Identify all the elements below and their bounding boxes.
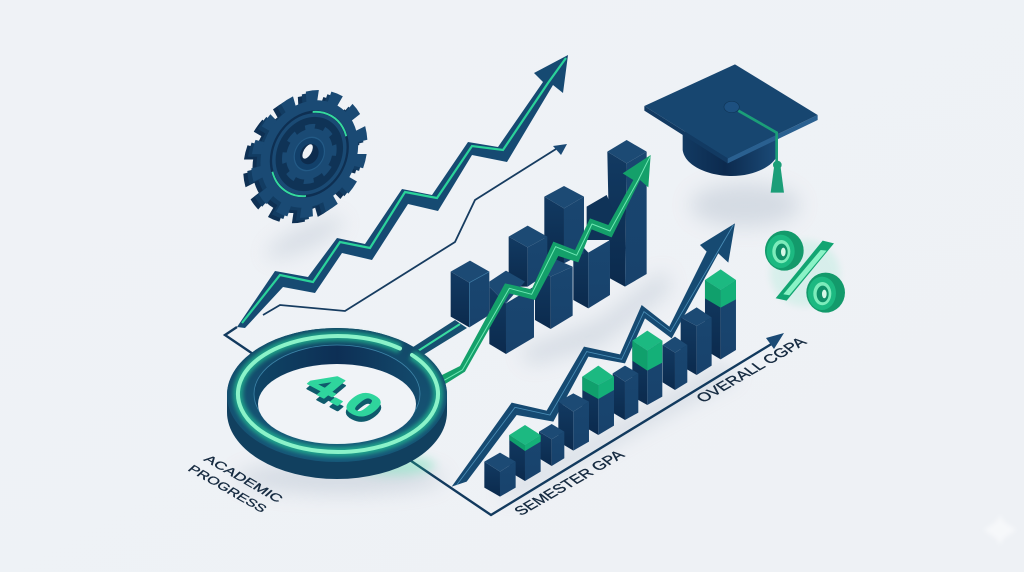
bar 2: [509, 425, 541, 481]
text: 4.0: 4.0: [296, 369, 393, 431]
icon: sparkle watermark: [984, 515, 1016, 545]
soft floor shadows: [235, 183, 800, 500]
bar 4: [558, 393, 589, 451]
icon: gear: [228, 77, 382, 236]
bar: second short: [535, 258, 573, 329]
bar 8: [663, 337, 687, 390]
icon: percent sign: [765, 231, 845, 313]
ring body: [227, 328, 447, 479]
ring: 4.0 GPA: [227, 328, 447, 479]
arrow: green trend: [440, 155, 651, 387]
bar: third: [509, 226, 547, 287]
arrow: top cumulative line: [237, 55, 568, 328]
bar 10: [705, 269, 736, 359]
cap skull: [683, 130, 777, 176]
bar 1: [484, 453, 516, 497]
percent upper circle: [765, 231, 804, 271]
arrow: overall trend: [452, 223, 735, 487]
percent slash: [776, 241, 834, 301]
label: academic progress: [185, 453, 286, 515]
connector from ring to bars: [410, 320, 467, 360]
bar 6: [613, 366, 638, 420]
label: semester GPA: SEMESTER GPA: [511, 448, 629, 518]
bar 3: [539, 424, 564, 466]
cap tassel: [738, 111, 784, 193]
arrow and bar chart: semester GPA bars: [452, 223, 736, 497]
bar 5: [582, 366, 614, 435]
bar 7: [632, 331, 662, 405]
bar chart: middle bars: [440, 140, 651, 387]
bar 9: [681, 307, 712, 375]
ring glow: [238, 336, 438, 452]
icon: graduation cap: [644, 64, 818, 193]
bar: left: [451, 261, 489, 327]
bar: short right: [573, 237, 610, 308]
label: academic progress: ACADEMIC: [201, 453, 286, 505]
bar: tall back right: [607, 140, 647, 287]
bar: tall middle: [544, 186, 584, 263]
axes of main chart: [225, 327, 784, 515]
label: academic progress: PROGRESS: [185, 463, 270, 515]
label: overall CGPA: OVERALL CGPA: [693, 335, 811, 405]
text: 4.0: 4.0: [296, 364, 393, 426]
arrow: thin trend line: [263, 144, 567, 315]
bar: back small: [587, 195, 612, 240]
percent lower circle: [806, 273, 845, 313]
cap board: [644, 64, 818, 163]
bar: low front: [489, 271, 534, 354]
